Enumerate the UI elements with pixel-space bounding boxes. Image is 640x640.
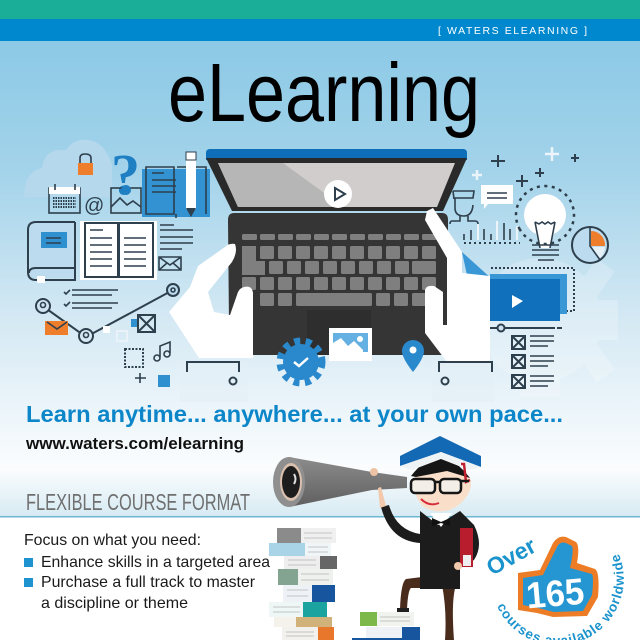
body text bbox=[24, 532, 270, 612]
book stack bbox=[269, 528, 337, 640]
book 4 bbox=[278, 569, 333, 585]
icon: location pin bbox=[402, 340, 424, 372]
smile bbox=[421, 499, 439, 504]
icon: picture card bbox=[329, 328, 372, 361]
book 3 bbox=[284, 556, 337, 569]
courses badge bbox=[482, 532, 624, 640]
icon: checklist boxes bbox=[512, 336, 554, 388]
laptop bezel bbox=[206, 158, 467, 211]
right bracket and dial bbox=[432, 362, 494, 402]
shirt and bow tie bbox=[430, 513, 452, 527]
icon: light square bbox=[117, 331, 127, 341]
laptop base bbox=[228, 213, 448, 355]
header label: [ WATERS ELEARNING ] bbox=[438, 25, 587, 37]
icon: orange envelope bbox=[45, 321, 68, 335]
section rule bbox=[0, 516, 640, 518]
play button bbox=[324, 180, 352, 208]
bullet text 2: Purchase a full track to master bbox=[41, 574, 256, 591]
intro line: Focus on what you need: bbox=[24, 532, 201, 549]
icon: instructor bbox=[450, 191, 478, 224]
section heading: FLEXIBLE COURSE FORMAT bbox=[26, 489, 250, 515]
bullet text 1: Enhance skills in a targeted area bbox=[41, 554, 270, 571]
icon: bar chart bbox=[464, 221, 520, 243]
background gear bbox=[478, 258, 618, 397]
book 6 bbox=[269, 602, 327, 617]
book 5 bbox=[283, 585, 335, 602]
left icon cluster bbox=[24, 140, 210, 387]
icon: blue open book with pencil bbox=[142, 152, 210, 218]
book 8 bbox=[282, 627, 334, 640]
front shoe bbox=[397, 608, 409, 612]
student character bbox=[273, 436, 481, 640]
tagline: Learn anytime... anywhere... at your own pace... bbox=[26, 401, 563, 427]
book hat bbox=[400, 436, 481, 467]
icon: crossed box bbox=[131, 315, 155, 332]
book step under foot bbox=[352, 612, 420, 640]
book 7 bbox=[274, 617, 332, 627]
telescope bbox=[273, 457, 407, 507]
icon: padlock bbox=[78, 154, 93, 175]
icon: pie chart bbox=[572, 227, 608, 263]
section band behind heading bbox=[0, 471, 640, 517]
hair bbox=[411, 455, 470, 478]
icon: text lines bbox=[160, 225, 193, 249]
torso bbox=[420, 511, 479, 589]
hand on telescope bbox=[378, 487, 386, 508]
laptop bbox=[206, 149, 467, 355]
title: eLearning bbox=[168, 46, 480, 139]
icon: video player bbox=[462, 252, 574, 321]
icon: music note bbox=[154, 342, 170, 361]
icon: dotted square bbox=[125, 349, 143, 367]
right icon cluster bbox=[450, 147, 608, 388]
website url: www.waters.com/elearning bbox=[25, 434, 244, 453]
icon: speech bubble bbox=[481, 185, 513, 209]
icon: gear with check bbox=[280, 341, 322, 383]
icon: picture frame bbox=[111, 185, 141, 213]
red ribbon bbox=[461, 464, 470, 482]
icon: slider bbox=[490, 324, 562, 332]
glasses bbox=[411, 479, 469, 493]
icon: blue square bbox=[158, 375, 170, 387]
bullet square 2 bbox=[24, 578, 33, 587]
header: teal strip bbox=[0, 0, 640, 19]
icon: light bulb bbox=[505, 175, 585, 260]
caption arc guide bbox=[497, 552, 624, 640]
left hand bbox=[169, 244, 253, 358]
icon: white sparkles bbox=[472, 147, 559, 180]
icon: closed book bbox=[28, 222, 75, 283]
icon: calendar bbox=[49, 184, 80, 213]
legs bbox=[400, 577, 456, 640]
icon: at sign: @ bbox=[84, 195, 104, 217]
sky gradient bbox=[0, 41, 640, 471]
icon: checklist bbox=[64, 290, 118, 308]
icon: network path bbox=[36, 284, 179, 343]
laptop screen bbox=[218, 163, 455, 207]
screen shade bbox=[218, 163, 333, 207]
icon: open book bbox=[80, 221, 157, 280]
laptop lid blue edge bbox=[206, 149, 467, 160]
thumbs up icon bbox=[518, 537, 599, 617]
icon: question mark: ? bbox=[111, 142, 140, 207]
icon: plus bbox=[135, 373, 146, 383]
icon: cloud bbox=[24, 140, 112, 197]
raised arm bbox=[381, 505, 420, 543]
head bbox=[413, 468, 471, 511]
bullet square 1 bbox=[24, 558, 33, 567]
trackpad bbox=[307, 310, 371, 355]
hat underside bbox=[400, 452, 481, 470]
bullet text 2 continued: a discipline or theme bbox=[41, 595, 188, 612]
badge number: 165 bbox=[524, 571, 586, 617]
left bracket and dial bbox=[180, 362, 248, 402]
icon: envelope bbox=[159, 257, 181, 270]
right hand bbox=[425, 208, 490, 362]
badge word Over: Over bbox=[482, 532, 540, 580]
book 2 bbox=[269, 543, 331, 556]
red book bbox=[454, 528, 473, 570]
header: blue strip bbox=[0, 19, 640, 41]
book 1 bbox=[277, 528, 336, 543]
icon: plus signs bbox=[491, 154, 579, 187]
keyboard keys bbox=[242, 234, 437, 306]
